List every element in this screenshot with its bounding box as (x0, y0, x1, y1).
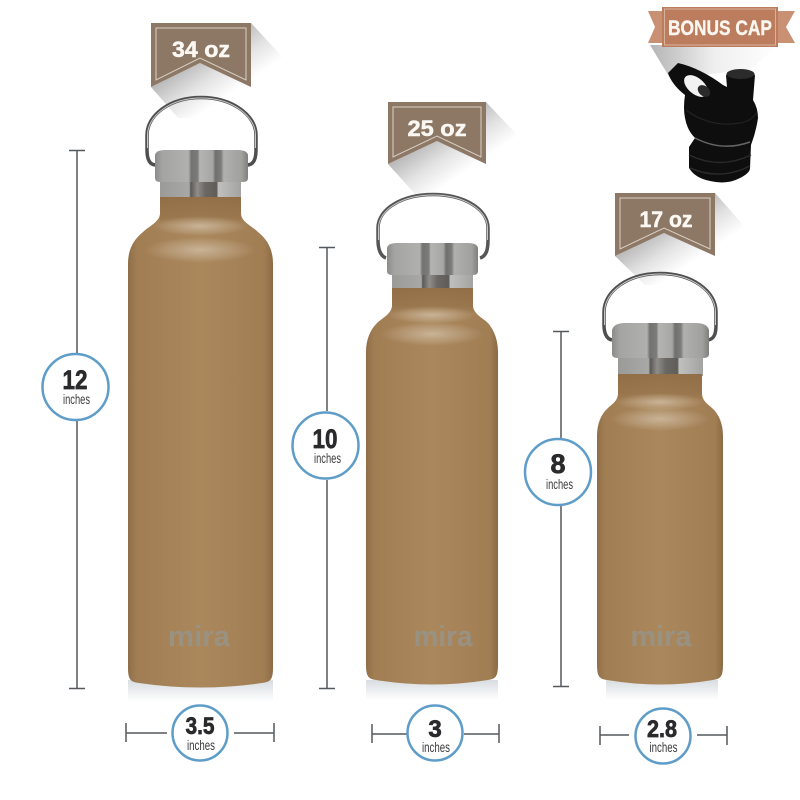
banner: 25 oz (388, 102, 524, 195)
cap body (668, 63, 758, 182)
inset line (156, 28, 246, 80)
neck shading (160, 197, 241, 225)
body (128, 197, 273, 688)
label: 34 oz (172, 37, 230, 62)
collar (618, 356, 703, 376)
reflection (128, 680, 273, 702)
dimension: 2.8 inches width: inches (650, 739, 678, 755)
dimension: 3 inches width: inches (422, 739, 450, 755)
lid (155, 150, 248, 182)
ribbon tails (648, 11, 664, 43)
neck shading (392, 288, 473, 314)
ribbon (151, 23, 251, 87)
inset line (620, 198, 710, 249)
loop hole (680, 71, 712, 101)
ribbon (615, 193, 715, 256)
shoulder highlights (616, 393, 704, 411)
lid (612, 323, 709, 358)
shoulder highlights (152, 216, 248, 236)
spout collar line (686, 110, 757, 124)
dimension: 10 inches height: 10 (312, 424, 338, 454)
ribbon (388, 102, 486, 164)
body (597, 374, 723, 684)
collar (392, 274, 473, 290)
dimension: 12 inches height: 12 (62, 365, 88, 395)
dimension: 2.8 inches width: 2.8 (647, 716, 677, 743)
dimension: 10 inches height: inches (314, 450, 341, 466)
banner: 34 oz (151, 23, 290, 118)
reflection (366, 680, 498, 700)
dimension: 10 inches height (292, 247, 358, 688)
dimension: 3.5 inches width (126, 706, 274, 760)
dimension: 12 inches height (42, 150, 108, 688)
threads (689, 155, 751, 174)
bottle: 17 oz (597, 274, 723, 700)
dimension: 12 inches height: inches (63, 391, 90, 407)
dimension: 3 inches width (372, 706, 499, 760)
label: 17 oz (640, 207, 692, 232)
handle (378, 194, 488, 258)
ribbon panel (662, 7, 778, 47)
spout top (726, 69, 754, 79)
dimension: 3 inches width: 3 (428, 716, 442, 743)
banner: 17 oz (615, 193, 752, 285)
long shadow (615, 193, 752, 285)
label: 25 oz (408, 116, 466, 141)
lid (387, 243, 478, 275)
dimension: 8 inches height (525, 331, 591, 686)
bonus cap ribbon (648, 7, 795, 78)
dimension: 2.8 inches width (600, 708, 727, 764)
bottle: 25 oz (366, 194, 498, 700)
logo: mira (630, 621, 692, 653)
handle (147, 98, 256, 165)
dimension: 3.5 inches width: 3.5 (186, 713, 214, 740)
logo: mira (414, 621, 473, 653)
bottle: 34 oz (128, 98, 273, 702)
collar (160, 180, 241, 199)
shoulder highlights (388, 306, 476, 324)
handle (604, 274, 716, 340)
label: BONUS CAP (668, 17, 772, 40)
logo: mira (168, 621, 231, 653)
bonus cap photo (668, 63, 758, 182)
long shadow (388, 102, 524, 195)
dimension: 3.5 inches width: inches (187, 737, 215, 753)
thread ring (695, 138, 750, 146)
reflection (606, 680, 718, 700)
neck shading (618, 374, 702, 402)
dimension: 8 inches height: inches (546, 476, 573, 492)
body (366, 288, 498, 684)
long shadow (151, 23, 290, 118)
inset line (393, 107, 481, 157)
shadow (650, 45, 778, 78)
dimension: 8 inches height: 8 (550, 449, 566, 479)
